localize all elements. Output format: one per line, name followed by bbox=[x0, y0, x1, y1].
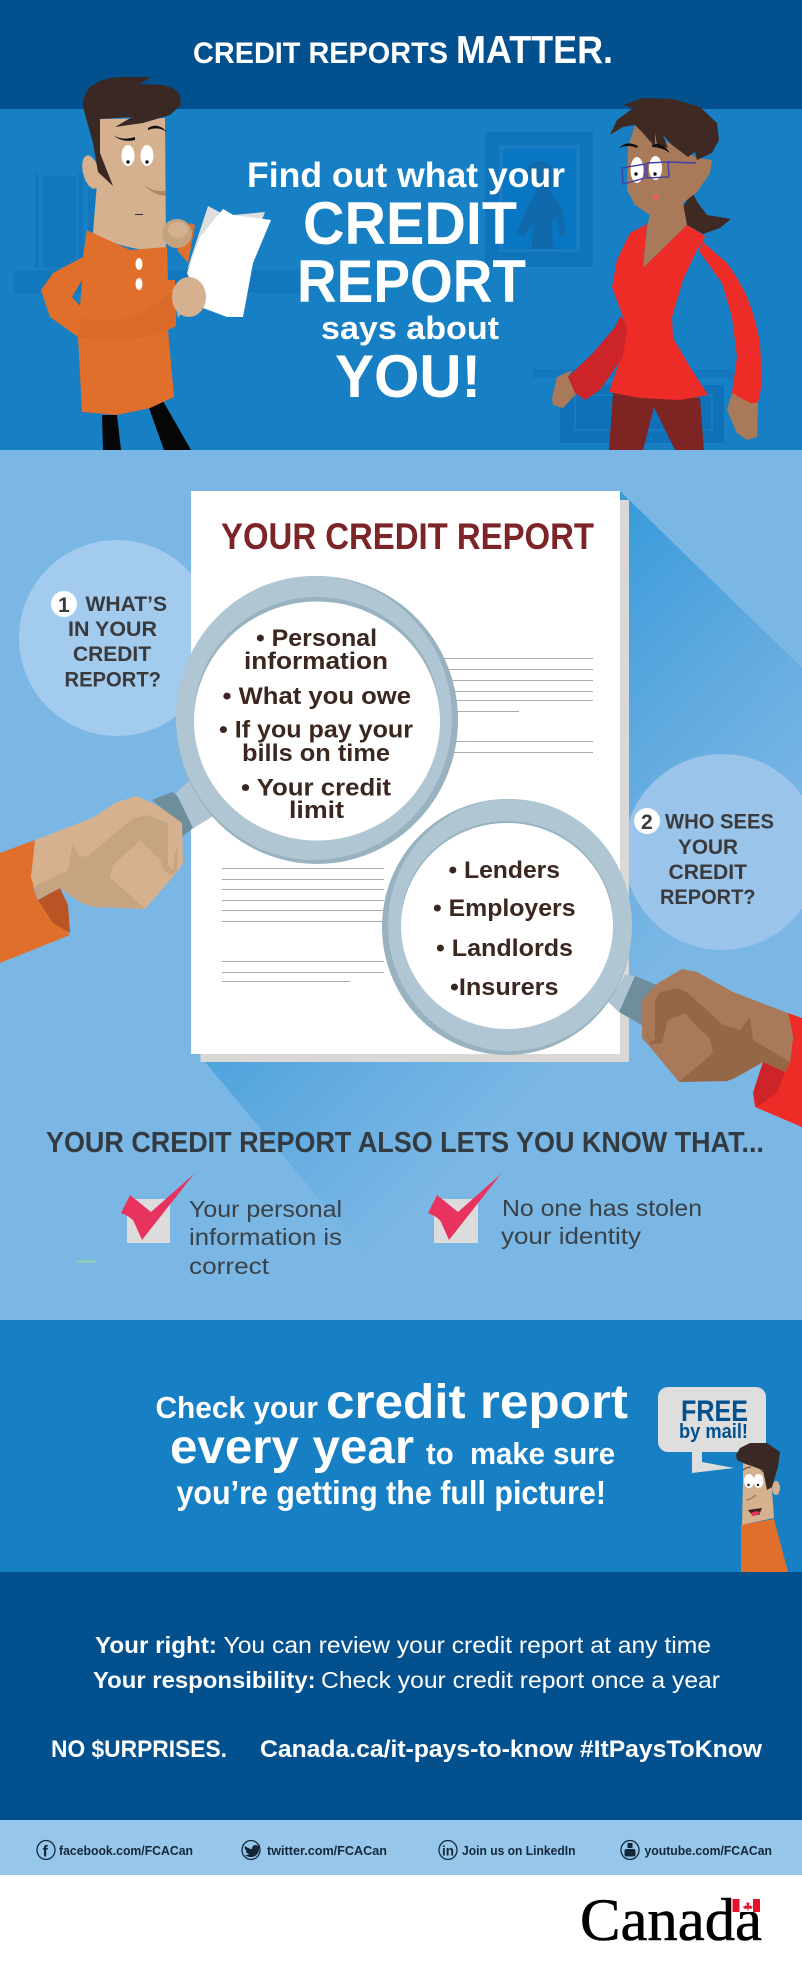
call to action band bbox=[0, 1320, 802, 1572]
hero headline: Find out what your bbox=[247, 156, 565, 195]
callout text 2: REPORT? bbox=[660, 886, 756, 909]
callout text 2: WHO SEES bbox=[665, 810, 774, 834]
lens text: who sees the report bbox=[433, 857, 576, 1001]
checkbox 2 bbox=[428, 1174, 501, 1243]
small man's ear bbox=[772, 1481, 780, 1495]
callout text 1 bbox=[51, 591, 167, 692]
lens text: what is in the report bbox=[219, 625, 413, 824]
social link: linkedin: Join us on LinkedIn bbox=[462, 1843, 576, 1858]
man's legs bbox=[102, 401, 191, 450]
small character with speech bubble bbox=[736, 1443, 788, 1572]
checkbox 1 bbox=[121, 1174, 194, 1243]
checklist item 1 bbox=[121, 1174, 342, 1279]
social link: linkedin bbox=[439, 1840, 576, 1860]
call to action text: credit report bbox=[326, 1376, 628, 1429]
hero headline bbox=[247, 156, 565, 410]
number badge 2: 2 bbox=[641, 811, 653, 834]
credit report document bbox=[191, 491, 629, 1062]
checklist item 2 bbox=[428, 1174, 702, 1249]
header band bbox=[0, 0, 802, 109]
callout text 1: CREDIT bbox=[73, 643, 151, 666]
knuckles bbox=[645, 988, 790, 1082]
woman's red top bbox=[609, 224, 708, 400]
shirt buttons bbox=[136, 258, 142, 290]
hero background bbox=[0, 109, 802, 450]
woman's ponytail bbox=[683, 192, 731, 234]
lens text: what is in the report: • Personal bbox=[256, 625, 377, 652]
checklist text 2: your identity bbox=[501, 1223, 642, 1249]
rights and responsibilities text bbox=[93, 1632, 720, 1693]
grip bbox=[152, 792, 193, 838]
man's hair bbox=[83, 77, 181, 186]
man's ear bbox=[79, 154, 103, 190]
icon: linkedin: in bbox=[442, 1842, 454, 1858]
main light blue panel bbox=[0, 450, 802, 1320]
rights and responsibilities text: You can review your credit report at any time bbox=[224, 1632, 711, 1658]
woman's right arm bbox=[699, 242, 762, 403]
hero headline: REPORT bbox=[297, 248, 526, 315]
call to action text: you’re getting the full picture! bbox=[176, 1474, 606, 1511]
magnifier handle: left bbox=[176, 778, 215, 829]
rights panel bbox=[0, 1572, 802, 1820]
call to action text: to make sure bbox=[426, 1436, 615, 1471]
social link: twitter bbox=[242, 1840, 387, 1860]
small man's face bbox=[743, 1467, 764, 1516]
social link: twitter: twitter.com/FCACan bbox=[267, 1843, 387, 1858]
magnifier handle: right bbox=[608, 975, 635, 1012]
sleeve bbox=[753, 1013, 802, 1127]
lens text: what is in the report: • Your credit bbox=[241, 774, 391, 802]
woman's left sleeve bbox=[568, 316, 627, 400]
callout text 1: IN YOUR bbox=[68, 618, 157, 641]
fist bbox=[642, 969, 793, 1082]
subheading: also lets you know: YOUR CREDIT REPORT ALSO LETS YOU KNOW THAT... bbox=[46, 1127, 764, 1159]
lens text: who sees the report: •Insurers bbox=[450, 974, 558, 1001]
shirt arm shading bbox=[78, 293, 176, 341]
callout text 1: REPORT? bbox=[64, 668, 161, 692]
fist bbox=[31, 796, 183, 909]
icon: facebook bbox=[37, 1840, 55, 1860]
right hand holding magnifier bbox=[642, 969, 802, 1127]
small man's hair bbox=[736, 1443, 780, 1490]
lens text: what is in the report: • If you pay your bbox=[219, 716, 413, 744]
icon: facebook: f bbox=[42, 1844, 48, 1860]
man's face details bbox=[113, 126, 167, 215]
woman's hands bbox=[552, 370, 758, 440]
checklist text 1 bbox=[189, 1196, 342, 1279]
footer bbox=[0, 1875, 802, 1962]
title: MATTER. bbox=[456, 29, 613, 72]
rights and responsibilities text: Check your credit report once a year bbox=[321, 1667, 720, 1693]
callout text 1: WHAT’S bbox=[86, 593, 167, 616]
document heading: YOUR CREDIT REPORT bbox=[221, 516, 594, 557]
checklist text 2 bbox=[501, 1195, 702, 1249]
sleeve bbox=[0, 840, 70, 963]
magnifier grip: right bbox=[619, 976, 657, 1027]
woman's trousers bbox=[609, 393, 704, 450]
magnifying glass 1 bbox=[176, 576, 458, 864]
sleeve shadow bbox=[38, 888, 70, 933]
hero headline: YOU! bbox=[335, 343, 481, 410]
campaign line bbox=[51, 1736, 762, 1763]
social link: youtube: youtube.com/FCACan bbox=[644, 1843, 772, 1858]
man's upper fist bbox=[162, 219, 192, 248]
social strip bbox=[0, 1820, 802, 1875]
campaign line: Canada.ca/it-pays-to-know #ItPaysToKnow bbox=[260, 1736, 762, 1763]
small man's shirt bbox=[741, 1519, 788, 1572]
lens text: what is in the report: bills on time bbox=[242, 740, 390, 767]
room background furniture bbox=[14, 132, 733, 443]
speech bubble: free by mail: FREE bbox=[681, 1395, 748, 1428]
character: woman with glasses bbox=[552, 98, 762, 450]
checklist text 1: Your personal bbox=[189, 1196, 342, 1222]
woman's head and neck bbox=[627, 125, 712, 268]
speech bubble: free by mail: by mail! bbox=[679, 1421, 748, 1443]
call to action text: every year bbox=[170, 1421, 414, 1474]
magnifying glass 2 bbox=[382, 799, 632, 1055]
rights and responsibilities text: Your right: bbox=[95, 1632, 217, 1658]
lens text: what is in the report: information bbox=[244, 648, 388, 675]
lens text: what is in the report: limit bbox=[289, 797, 344, 824]
call to action text bbox=[156, 1376, 628, 1511]
callout circle: what's in your credit report bbox=[19, 540, 215, 736]
lens text: who sees the report: • Employers bbox=[433, 895, 576, 922]
title: CREDIT REPORTS bbox=[193, 37, 448, 70]
man's orange shirt bbox=[41, 230, 176, 415]
hero headline: CREDIT bbox=[303, 190, 517, 257]
call to action text: Check your bbox=[156, 1390, 318, 1425]
callout circle: who sees your credit report bbox=[624, 754, 802, 950]
man's lower hand bbox=[172, 277, 206, 318]
lens text: who sees the report: • Landlords bbox=[436, 935, 573, 962]
woman's face details bbox=[619, 143, 696, 200]
left hand holding magnifier bbox=[0, 792, 193, 963]
checklist text 2: No one has stolen bbox=[502, 1195, 702, 1221]
checklist text 1: information is bbox=[189, 1224, 342, 1250]
speech bubble: free by mail bbox=[658, 1387, 766, 1473]
report paper in hand bbox=[187, 206, 271, 317]
title bbox=[193, 29, 613, 72]
callout text 2: YOUR bbox=[678, 836, 738, 859]
man's back arm bbox=[177, 223, 195, 263]
icon: youtube bbox=[621, 1840, 639, 1860]
woman's hair bbox=[610, 98, 719, 160]
social link: facebook: facebook.com/FCACan bbox=[59, 1843, 193, 1858]
lens text: who sees the report: • Lenders bbox=[448, 857, 560, 884]
Canada wordmark: Canada bbox=[580, 1887, 762, 1953]
icon: Canadian flag bbox=[732, 1899, 760, 1912]
man's head and neck bbox=[93, 118, 166, 250]
sleeve shadow bbox=[753, 1062, 785, 1107]
social link: youtube bbox=[621, 1840, 772, 1860]
callout text 2: CREDIT bbox=[668, 861, 747, 884]
campaign line: NO $URPRISES. bbox=[51, 1736, 227, 1763]
lens text: what is in the report: • What you owe bbox=[222, 683, 411, 710]
small man's head bbox=[742, 1463, 774, 1525]
icon: twitter bbox=[242, 1840, 260, 1860]
document diagonal shadow bbox=[205, 491, 802, 1320]
rights and responsibilities text: Your responsibility: bbox=[93, 1667, 316, 1693]
character: man holding report bbox=[41, 77, 271, 450]
callout text 2 bbox=[634, 808, 774, 909]
hero headline: says about bbox=[321, 310, 499, 346]
number badge 1: 1 bbox=[58, 594, 70, 617]
knuckles bbox=[34, 815, 178, 909]
social link: facebook bbox=[37, 1840, 193, 1860]
checklist text 1: correct bbox=[189, 1253, 270, 1279]
